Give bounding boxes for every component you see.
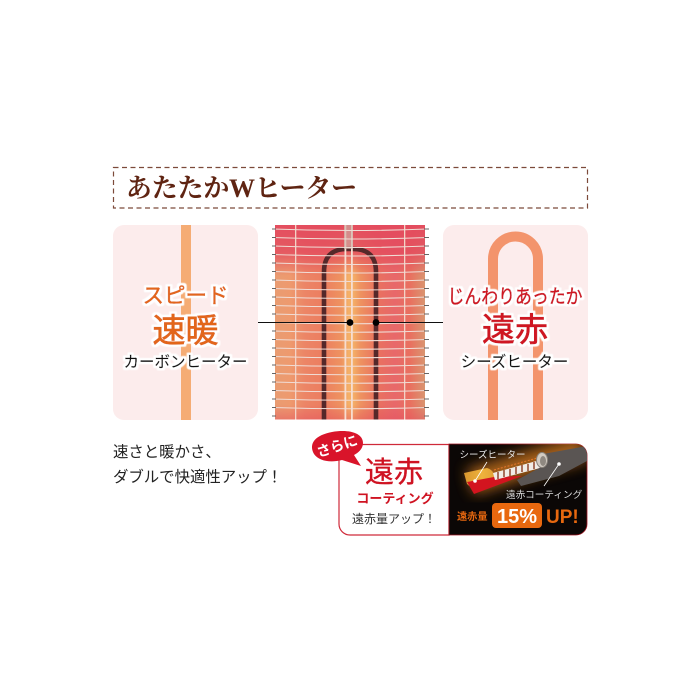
label: quick warmth: 速暖 [152, 312, 218, 349]
label: up: UP! [546, 507, 579, 528]
leader: coating [544, 464, 559, 486]
badge: 15%: 15% [497, 506, 537, 528]
heater glow [470, 448, 585, 482]
description text [113, 443, 282, 486]
grey coated tube [517, 446, 587, 486]
description text: 速さと暖かさ、 [113, 443, 221, 461]
heater element: dark U-shaped sheath tube [324, 249, 376, 420]
label: far infrared: 遠赤 [365, 456, 423, 489]
yellow heated tube [464, 468, 494, 486]
label: sheath heater name: シーズヒーター [461, 353, 568, 371]
panel: sheath heater [443, 225, 588, 420]
leader line: carbon heater [258, 319, 353, 326]
description text: ダブルで快適性アップ！ [113, 467, 282, 486]
white coil [493, 461, 540, 480]
panel: far-infrared coating [339, 444, 449, 535]
label: far infrared: 遠赤 [482, 311, 548, 348]
center carbon tube [295, 225, 405, 420]
title banner [114, 168, 588, 208]
leader line: sheath heater [373, 319, 443, 326]
label: gently warm: じんわりあったか [448, 286, 582, 308]
safety guard wires [273, 229, 428, 409]
label: carbon heater name: カーボンヒーター [123, 353, 248, 371]
label: far infrared amount: 遠赤量 [457, 510, 488, 523]
label: far infrared coating: 遠赤コーティング [506, 489, 583, 501]
icon: U-shaped sheath heating tube [493, 236, 538, 420]
leader: sheath heater [475, 462, 487, 481]
icon: straight carbon heating tube [181, 225, 191, 420]
label: speed: スピード [142, 284, 229, 308]
panel: carbon heater [113, 225, 258, 420]
label: far infrared amount up: 遠赤量アップ！ [352, 512, 436, 526]
orange dashed coil outline [494, 457, 541, 470]
callout bubble: moreover: さらに [315, 432, 359, 460]
red far-infrared coating [467, 476, 522, 494]
panel: heater photo [272, 225, 429, 420]
label: coating: コーティング [356, 491, 434, 506]
panel: coating diagram [449, 444, 587, 535]
label: sheath heater: シーズヒーター [460, 449, 526, 461]
title banner: あたたかWヒーター [126, 174, 357, 203]
guard wire end ticks [272, 229, 429, 416]
